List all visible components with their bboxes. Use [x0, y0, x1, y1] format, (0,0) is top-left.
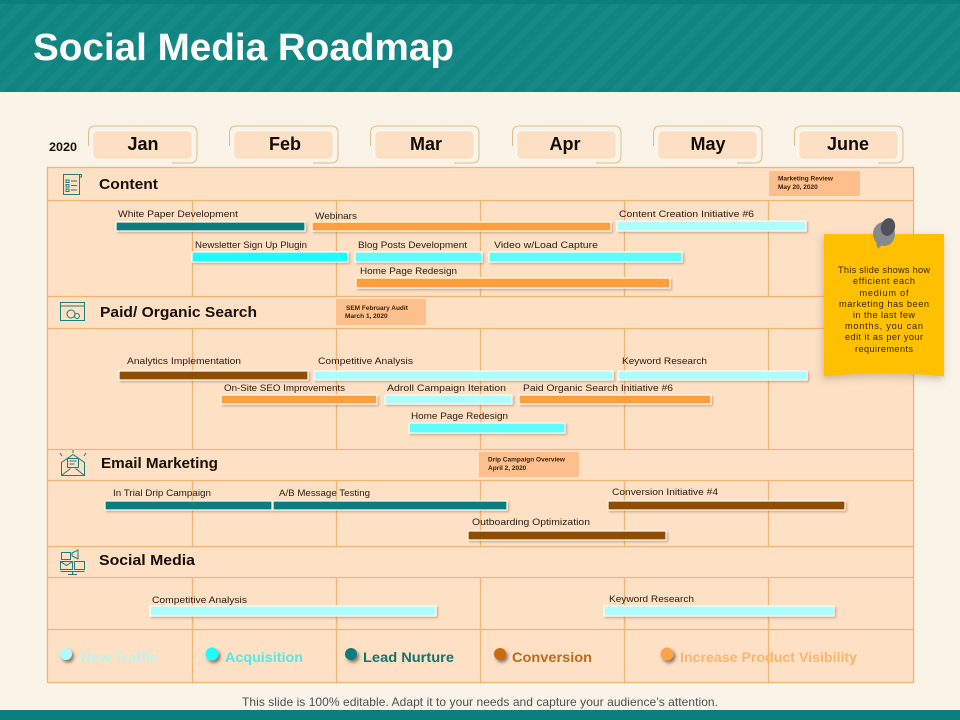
- task: Blog Posts Development: [355, 240, 482, 262]
- task: Newsletter Sign Up Plugin: Newsletter Sign Up Plugin: [195, 240, 307, 251]
- year label: 2020: [49, 140, 77, 154]
- task: Competitive Analysis: [150, 595, 436, 616]
- task: Paid Organic Search Initiative #6: [519, 383, 711, 404]
- sticky note text: in the last few: [853, 310, 915, 320]
- task: Webinars: [312, 211, 611, 231]
- task: Video w/Load Capture: [489, 240, 682, 262]
- task: Conversion Initiative #4: Conversion Initiative #4: [612, 487, 718, 498]
- month: Feb: [230, 126, 338, 163]
- task: Analytics Implementation: Analytics Implementation: [127, 356, 241, 367]
- icon: email envelope: [60, 450, 86, 476]
- task: Content Creation Initiative #6: [617, 209, 806, 231]
- month: June: [794, 126, 903, 163]
- callout: Drip Campaign Overview: Drip Campaign Overview: [488, 456, 566, 464]
- legend: Conversion: Conversion: [512, 649, 592, 665]
- task: Outboarding Optimization: Outboarding Optimization: [472, 517, 590, 528]
- legend: Lead Nurture: Lead Nurture: [363, 649, 454, 665]
- month: May: [654, 126, 762, 163]
- callout: Drip Campaign Overview: April 2, 2020: [488, 465, 527, 472]
- panel: Social Media: [60, 550, 834, 616]
- task: On-Site SEO Improvements: On-Site SEO Improvements: [224, 383, 345, 394]
- task: A/B Message Testing: A/B Message Testing: [279, 488, 370, 499]
- task: Competitive Analysis: Competitive Analysis: [318, 356, 413, 367]
- callout: Marketing Review: [769, 171, 860, 196]
- task: Competitive Analysis: [314, 356, 613, 380]
- task: Adroll Campaign Iteration: Adroll Campaign Iteration: [387, 383, 506, 394]
- task: Webinars: Webinars: [315, 211, 357, 222]
- callout: SEM February Audit: March 1, 2020: [345, 313, 388, 320]
- panel: Paid / Organic Search: [60, 299, 807, 433]
- task: Conversion Initiative #4: [608, 487, 845, 510]
- callout: Drip Campaign Overview: [479, 452, 579, 477]
- month: Jan: [88, 126, 197, 163]
- task: Outboarding Optimization: [468, 517, 666, 540]
- legend: Increase Product Visibility: Increase Product Visibility: [680, 649, 857, 665]
- task: Keyword Research: Keyword Research: [609, 594, 694, 605]
- legend: [60, 648, 857, 665]
- month: Apr: [512, 126, 621, 163]
- task: Keyword Research: [604, 594, 834, 616]
- task: Analytics Implementation: [119, 356, 308, 380]
- callout: SEM February Audit: [336, 299, 426, 325]
- task: On-Site SEO Improvements: [221, 383, 377, 404]
- task: Home Page Redesign: [409, 411, 565, 433]
- month tabs: [88, 126, 903, 163]
- heading: Content: Content: [99, 176, 158, 193]
- month: Jan: Jan: [127, 134, 159, 154]
- task: Blog Posts Development: Blog Posts Development: [358, 240, 467, 251]
- task: White Paper Development: [116, 209, 305, 231]
- task: Home Page Redesign: Home Page Redesign: [411, 411, 508, 422]
- month: Apr: Apr: [550, 134, 580, 154]
- sticky note text: efficient each: [853, 276, 915, 286]
- task: Home Page Redesign: [356, 266, 670, 288]
- sticky note text: months, you can: [845, 321, 923, 331]
- icon: web analytics: [60, 302, 84, 320]
- task: Content Creation Initiative #6: Content Creation Initiative #6: [619, 209, 754, 220]
- task: In Trial Drip Campaign: [105, 488, 272, 510]
- callout: SEM February Audit: SEM February Audit: [346, 305, 409, 312]
- legend: Acquisition: Acquisition: [225, 649, 303, 665]
- sticky note text: edit it as per your: [845, 332, 923, 342]
- task: White Paper Development: White Paper Development: [118, 209, 238, 220]
- panel: Email Marketing: [60, 450, 845, 540]
- legend: New Traffic: New Traffic: [81, 649, 158, 665]
- footer bar: [0, 710, 960, 720]
- sticky note: [824, 216, 944, 376]
- roadmap grid: [47, 168, 914, 682]
- month: Feb: Feb: [269, 134, 301, 154]
- month: Mar: Mar: [410, 134, 442, 154]
- month: Mar: [370, 126, 479, 163]
- icon: social media devices: [60, 550, 84, 574]
- task: Paid Organic Search Initiative #6: Paid Organic Search Initiative #6: [523, 383, 673, 394]
- month: June: June: [827, 134, 869, 154]
- task: Home Page Redesign: Home Page Redesign: [360, 266, 457, 277]
- sticky note text: medium of: [860, 288, 909, 298]
- callout: Marketing Review: May 20, 2020: [778, 184, 818, 191]
- heading: Social Media: Social Media: [99, 552, 196, 569]
- task: A/B Message Testing: [273, 488, 507, 510]
- task: Adroll Campaign Iteration: [385, 383, 512, 404]
- icon: push pin: [873, 216, 897, 249]
- footer note: This slide is 100% editable. Adapt it to your needs and capture your audience’s attention.: [242, 695, 718, 709]
- header banner: [0, 0, 960, 92]
- task: Video w/Load Capture: Video w/Load Capture: [494, 240, 598, 251]
- panel: Content: [64, 171, 860, 288]
- sticky note text: requirements: [855, 344, 913, 354]
- heading: Email Marketing: Email Marketing: [101, 455, 218, 472]
- task: Newsletter Sign Up Plugin: [192, 240, 348, 262]
- heading: Paid/ Organic Search: Paid/ Organic Search: [100, 304, 257, 321]
- sticky note text: marketing has been: [839, 299, 929, 309]
- icon: checklist: [64, 174, 82, 194]
- task: Keyword Research: Keyword Research: [622, 356, 707, 367]
- month: May: May: [690, 134, 726, 154]
- callout: Marketing Review: Marketing Review: [778, 176, 834, 182]
- task: In Trial Drip Campaign: In Trial Drip Campaign: [113, 488, 211, 499]
- title: Social Media Roadmap: [33, 27, 454, 69]
- task: Competitive Analysis: Competitive Analysis: [152, 595, 247, 606]
- sticky note text: This slide shows how: [838, 265, 930, 275]
- task: Keyword Research: [618, 356, 807, 380]
